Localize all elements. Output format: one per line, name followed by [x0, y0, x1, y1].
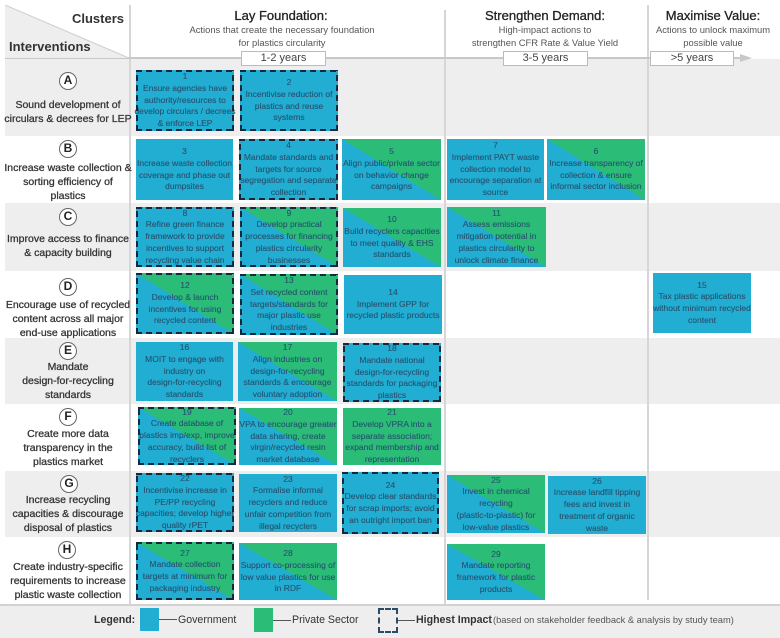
action 24 [342, 472, 439, 534]
action 25: Invest in chemical [462, 486, 530, 496]
action 11: unlock climate finance [455, 255, 538, 265]
action 14 [344, 275, 442, 334]
intervention G badge [60, 475, 78, 493]
action 8: incentives to support [146, 243, 224, 253]
action 26: treatment of organic [559, 511, 635, 521]
intervention D label: end-use applications [20, 327, 116, 339]
legend [94, 608, 734, 633]
timeline label: 1-2 years: 1-2 years [261, 52, 306, 64]
subheading: Strengthen Demand: High-impact actions to [499, 24, 591, 35]
action 19: recyclers [170, 454, 204, 464]
intervention A label: circulars & decrees for LEP [4, 113, 132, 125]
action 4: collection [271, 187, 306, 197]
subheading: Strengthen Demand [472, 24, 618, 48]
action 17: standards & encourage [244, 377, 331, 387]
action 4: segregation and separate [240, 175, 337, 185]
action 20: data sharing, create [250, 431, 326, 441]
intervention H label [10, 561, 126, 601]
action 18: 18 [387, 343, 397, 353]
intervention D badge: D [64, 279, 72, 293]
timeline arrow [5, 54, 752, 62]
action 21: representation [365, 454, 419, 464]
action 15 [653, 273, 751, 333]
action 5: 5 [389, 146, 394, 156]
action 19: accuracy, build list of [148, 442, 226, 452]
action 28: Support co-processing of [241, 560, 335, 570]
subheading: Strengthen Demand: strengthen CFR Rate & Value Yield [472, 37, 618, 48]
intervention C label: & capacity building [24, 247, 112, 259]
action 8: 8 [183, 208, 187, 218]
action 29: products [480, 584, 512, 594]
action 16: MOIT to engage with [145, 354, 224, 364]
action 18 [343, 343, 441, 402]
legend swatch: highest impact [378, 608, 398, 633]
intervention E label [22, 361, 114, 401]
action 19: 19 [182, 407, 192, 417]
action 9: plastics circularity [256, 243, 322, 253]
action 5: campaigns [371, 181, 412, 191]
legend label: government: Government [178, 614, 236, 626]
intervention H label: requirements to increase [10, 575, 126, 587]
intervention A badge [59, 72, 77, 90]
action 29: framework for plastic [457, 572, 535, 582]
action 17: Align industries on [253, 354, 322, 364]
action 26 [548, 476, 646, 534]
action 27: packaging industry [150, 583, 220, 593]
action 15: content [688, 315, 716, 325]
action 3: 3 [182, 146, 187, 156]
intervention H badge [58, 541, 76, 559]
legend label: private sector: Private Sector [292, 614, 359, 626]
action 21: separate association; [352, 431, 432, 441]
subheading: Maximise Value: Actions to unlock maximum [656, 24, 770, 35]
intervention A badge: A [64, 73, 72, 87]
intervention G label [12, 494, 124, 534]
action 9: processes for financing [245, 231, 333, 241]
intervention F label: transparency in the [23, 442, 113, 454]
action 16: industry on [164, 366, 205, 376]
intervention C badge: C [64, 209, 72, 223]
action 9 [240, 207, 338, 267]
action 17 [238, 342, 337, 401]
action 20: market database [256, 454, 320, 464]
action 7: Implement PAYT waste [452, 152, 539, 162]
action 17: voluntary adoption [253, 389, 322, 399]
action 1: 1 [183, 71, 187, 81]
action 9: Develop practical [256, 219, 322, 229]
intervention D label [6, 299, 130, 339]
action 13: major plastic use [257, 310, 321, 320]
action 4 [239, 139, 338, 200]
action 21: expand membership and [345, 442, 439, 452]
intervention C label: Improve access to finance [7, 233, 129, 245]
intervention G label: Increase recycling [26, 494, 110, 506]
action 21 [343, 408, 441, 465]
action 22: capacities; develop higher [136, 508, 234, 518]
action 9: businesses [268, 255, 310, 265]
action 18: plastics [378, 390, 406, 400]
intervention A label [4, 99, 132, 125]
action 22: Incentivise increase in [143, 485, 227, 495]
timeline label: 3-5 years: 3-5 years [523, 52, 568, 64]
action 16: 16 [180, 342, 189, 352]
action 27: targets at minimum for [143, 571, 227, 581]
intervention D label: Encourage use of recycled [6, 299, 130, 311]
legend connector: highest impact [398, 620, 415, 621]
action 22: 22 [180, 473, 190, 483]
action 10 [343, 208, 441, 267]
action 24: 24 [386, 480, 395, 490]
legend connector: government [159, 619, 177, 620]
action 8: framework to provide [145, 231, 225, 241]
action 28: in RDF [275, 583, 301, 593]
action 1: authority/resources to [144, 95, 226, 105]
action 25: low-value plastics [463, 522, 529, 532]
action 5: on behavior change [354, 170, 429, 180]
intervention B label: Increase waste collection & [4, 162, 132, 174]
intervention E badge [59, 342, 77, 360]
action 26: 26 [592, 476, 602, 486]
action 10: standards [373, 249, 411, 259]
action 7: 7 [493, 140, 498, 150]
action 3: coverage and phase out [139, 170, 230, 180]
action 26: fees and invest in [564, 499, 630, 509]
action 25: 25 [491, 475, 501, 485]
action 2: plastics and reuse [255, 100, 323, 110]
action 9: 9 [287, 208, 291, 218]
action 13: industries [271, 322, 307, 332]
intervention F label: plastics market [33, 456, 103, 468]
legend swatch: private sector [254, 608, 273, 632]
subheading: Lay Foundation: for plastics circularity [238, 37, 325, 48]
intervention G label: disposal of plastics [24, 522, 112, 534]
intervention E label: Mandate [48, 361, 88, 373]
action 23: Formalise informal [253, 485, 323, 495]
action 16: standards [166, 389, 203, 399]
action 14: Implement GPP for [357, 299, 429, 309]
action 23: illegal recyclers [259, 521, 317, 531]
legend title: Legend: [94, 614, 135, 626]
action 23: recyclers and reduce [249, 497, 327, 507]
intervention H label: Create industry-specific [13, 561, 123, 573]
action 6: informal sector inclusion [550, 181, 642, 191]
intervention D label: content across all major [13, 313, 123, 325]
timeline label: 1-2 years [241, 51, 326, 66]
action 6: Increase transparency of [549, 158, 643, 168]
intervention A label: Sound development of [15, 99, 121, 111]
action 15: Tax plastic applications [659, 291, 745, 301]
intervention E label: standards [45, 389, 91, 401]
action 28 [239, 543, 337, 600]
action 13: targets/standards for [250, 299, 328, 309]
subheading: Lay Foundation [189, 24, 375, 48]
action 2: 2 [287, 77, 291, 87]
action 22 [136, 473, 234, 532]
timeline label: >5 years: >5 years [671, 52, 713, 64]
intervention F label [23, 428, 113, 468]
action 19: plastics imp/exp, improve [139, 430, 235, 440]
heading: Lay Foundation: Lay Foundation: [234, 8, 328, 23]
action 5 [342, 139, 441, 200]
legend swatch: government [140, 608, 159, 631]
action 24: for scrap imports; avoid [346, 503, 435, 513]
action 22: quality rPET [162, 520, 208, 530]
action 18: standards for packaging [347, 378, 437, 388]
action 27: 27 [180, 548, 190, 558]
intervention D badge [59, 278, 77, 296]
action 11: mitigation potential in [457, 231, 536, 241]
heading: Strengthen Demand: Strengthen Demand: [485, 8, 605, 23]
action 12 [136, 273, 234, 334]
action 1 [136, 70, 234, 131]
action 1: Ensure agencies have [143, 83, 227, 93]
action 18: Mandate national [359, 355, 425, 365]
action 24: an outright import ban [349, 515, 432, 525]
action 20: virgin/recycled resin [250, 442, 326, 452]
legend label: highest impact: Highest Impact [416, 614, 492, 626]
action 8: recycling value chain [146, 255, 224, 265]
action 20 [239, 408, 337, 465]
action 24: Develop clear standards [345, 491, 436, 501]
intervention B label: sorting efficiency of [23, 176, 113, 188]
action 16 [136, 342, 233, 401]
header corner cell: Clusters [72, 11, 124, 26]
action 11: plastics circularity to [458, 243, 535, 253]
timeline label: 3-5 years [503, 51, 588, 66]
action 8: Refine green finance [146, 219, 224, 229]
action 27: Mandate collection [150, 559, 220, 569]
action 11 [447, 207, 546, 267]
action 23 [239, 474, 337, 532]
action 19 [138, 407, 236, 465]
action 23: unfair competition from [245, 509, 331, 519]
action 1: develop circulars / decrees [134, 106, 236, 116]
action 3: dumpsites [165, 181, 204, 191]
intervention F badge [59, 408, 77, 426]
action 28: low value plastics for use [241, 572, 335, 582]
legend connector: private sector [273, 620, 291, 621]
action 20: VPA to encourage greater [239, 419, 337, 429]
action 19: Create database of [151, 418, 223, 428]
action 12: Develop & launch [152, 292, 218, 302]
intervention B label [4, 162, 132, 202]
action 29 [447, 544, 545, 600]
intervention E label: design-for-recycling [22, 375, 114, 387]
subheading: Lay Foundation: Actions that create the necessary foundation [189, 24, 375, 35]
action 17: 17 [283, 342, 292, 352]
intervention E badge: E [64, 343, 72, 357]
action 8 [136, 207, 234, 267]
action 3: Increase waste collection [137, 158, 232, 168]
action 12: recycled content [154, 315, 216, 325]
action 28: 28 [283, 548, 293, 558]
action 2: systems [273, 112, 305, 122]
action 14: recycled plastic products [346, 310, 440, 320]
action 13 [240, 274, 338, 335]
action 11: Assess emissions [463, 219, 530, 229]
action 20: 20 [283, 407, 293, 417]
intervention G label: capacities & discourage [13, 508, 123, 520]
action 12: incentives for using [149, 304, 221, 314]
action 13: 13 [284, 275, 294, 285]
action 14: 14 [388, 287, 398, 297]
intervention F label: Create more data [27, 428, 109, 440]
action 27 [136, 542, 234, 600]
intervention B badge: B [64, 141, 72, 155]
action 7: collection model to [460, 164, 531, 174]
action 2: Incentivise reduction of [246, 89, 332, 99]
action 18: design-for-recycling [355, 367, 429, 377]
action 25: (plastic-to-plastic) for [457, 510, 535, 520]
heading: Maximise Value: Maximise Value: [666, 8, 760, 23]
action 21: Develop VPRA into a [352, 419, 432, 429]
intervention C label [7, 233, 129, 259]
action 23: 23 [283, 474, 293, 484]
action 6 [547, 139, 645, 200]
action 4: targets for source [255, 164, 322, 174]
action 21: 21 [387, 407, 397, 417]
action 7 [447, 139, 544, 200]
action 6: 6 [594, 146, 598, 156]
action 11: 11 [492, 208, 501, 218]
action 26: waste [586, 523, 608, 533]
subheading: Maximise Value: possible value [683, 37, 743, 48]
action 15: 15 [697, 280, 707, 290]
intervention B badge [59, 140, 77, 158]
action 4: 4 [286, 140, 291, 150]
timeline label: >5 years [650, 51, 734, 66]
action 29: Mandate reporting [461, 560, 530, 570]
action 13: Set recycled content [250, 287, 328, 297]
action 6: collection & ensure [560, 170, 632, 180]
legend note: (based on stakeholder feedback & analysis by study team) [493, 615, 734, 625]
action 7: encourage separation at [450, 175, 541, 185]
header corner cell: Interventions [9, 39, 91, 54]
action 2 [240, 70, 338, 131]
subheading: Maximise Value [656, 24, 770, 48]
action 4: Mandate standards and [244, 152, 333, 162]
action 29: 29 [491, 549, 501, 559]
action 22: PE/PP recycling [155, 497, 215, 507]
action 25 [447, 475, 545, 533]
action 12: 12 [180, 280, 190, 290]
intervention B label: plastics [50, 190, 86, 202]
action 1: & enforce LEP [158, 118, 212, 128]
intervention C badge [59, 208, 77, 226]
action 17: design-for-recycling [250, 366, 325, 376]
action 25: recycling [479, 498, 513, 508]
action 10: 10 [387, 214, 397, 224]
action 10: Build recyclers capacities [344, 226, 440, 236]
intervention F badge: F [64, 409, 72, 423]
action 5: Align public/private sector [343, 158, 440, 168]
action 3 [136, 139, 233, 200]
intervention G badge: G [64, 476, 74, 490]
intervention H label: plastic waste collection [15, 589, 121, 601]
action 26: Increase landfill tipping [554, 487, 640, 497]
action 15: without minimum recycled [653, 303, 751, 313]
action 10: to meet quality & EHS [350, 238, 434, 248]
header corner cell [5, 5, 128, 58]
action 7: source [483, 187, 508, 197]
intervention H badge: H [63, 542, 71, 556]
action 16: design-for-recycling [147, 377, 222, 387]
